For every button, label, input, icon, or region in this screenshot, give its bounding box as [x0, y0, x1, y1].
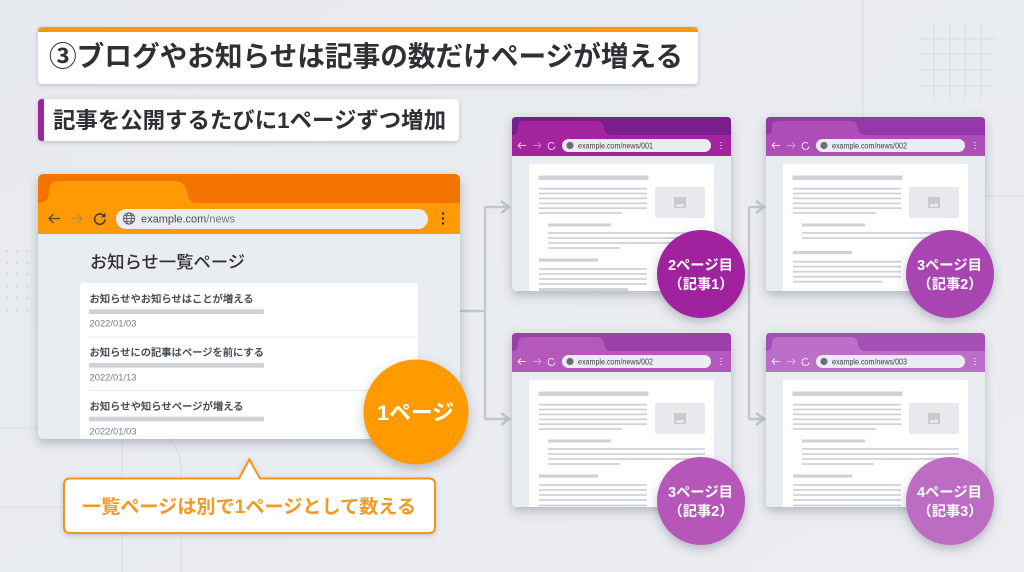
icon: image placeholder	[655, 187, 705, 218]
heading: list page: お知らせ一覧ページ	[90, 253, 245, 272]
address bar: example.com/news/001	[578, 142, 653, 150]
panel: article browser 3 page bottom	[512, 333, 731, 507]
title	[38, 27, 698, 84]
list card: お知らせにの記事はページを前にする	[90, 346, 264, 359]
badge: 1 page: 1ページ	[377, 400, 454, 425]
panel: article browser 2 page	[512, 117, 731, 291]
address bar	[816, 139, 965, 152]
arrow: list page to article pages	[460, 201, 509, 425]
icon: image placeholder	[909, 403, 959, 434]
badge: page 3 top	[906, 230, 994, 318]
address bar: example.com/news/002	[832, 142, 907, 150]
article card	[783, 380, 968, 507]
badge: page 3 bottom: 3ページ目	[668, 485, 733, 501]
article card	[529, 380, 714, 507]
list card: 2022/01/03	[90, 318, 136, 328]
badge: page 4: （記事3）	[917, 502, 983, 520]
address bar: example.com/news	[141, 214, 235, 226]
address bar	[562, 139, 711, 152]
list card: お知らせや知らせページが増える	[90, 400, 243, 413]
article card	[783, 164, 968, 291]
icon: image placeholder	[655, 403, 705, 434]
callout: 一覧ページは別で1ページとして数える	[82, 496, 416, 518]
subtitle: 記事を公開するたびに1ページずつ増加	[53, 108, 446, 133]
icon: navigation buttons	[49, 212, 444, 225]
address bar	[816, 355, 965, 368]
title: ③ブログやお知らせは記事の数だけページが増える	[49, 41, 683, 72]
subtitle	[38, 99, 459, 141]
list card: 2022/01/03	[90, 426, 136, 436]
badge: page 4: 4ページ目	[917, 485, 982, 501]
address bar	[562, 355, 711, 368]
badge: page 3 top: （記事2）	[917, 275, 983, 293]
icon: image placeholder	[909, 187, 959, 218]
badge: page 3 bottom: （記事2）	[668, 502, 734, 520]
panel: article browser 3 page top	[766, 117, 985, 291]
address bar: example.com/news/003	[832, 358, 907, 366]
list card: お知らせやお知らせはことが増える	[90, 292, 254, 305]
callout	[64, 460, 435, 533]
badge: page 2: （記事1）	[668, 275, 734, 293]
panel: article browser 4 page	[766, 333, 985, 507]
badge: page 2: 2ページ目	[668, 258, 733, 274]
badge: page 3 bottom	[657, 457, 745, 545]
address bar	[116, 209, 428, 229]
panel: list page browser	[38, 174, 460, 439]
article card	[529, 164, 714, 291]
address bar: example.com/news/002	[578, 358, 653, 366]
badge: page 3 top: 3ページ目	[917, 258, 982, 274]
badge: page 2	[657, 230, 745, 318]
list card	[80, 283, 418, 439]
badge: 1 page	[364, 360, 468, 464]
list card: 2022/01/13	[90, 372, 136, 382]
badge: page 4	[906, 457, 994, 545]
arrow: between article columns	[749, 201, 764, 425]
